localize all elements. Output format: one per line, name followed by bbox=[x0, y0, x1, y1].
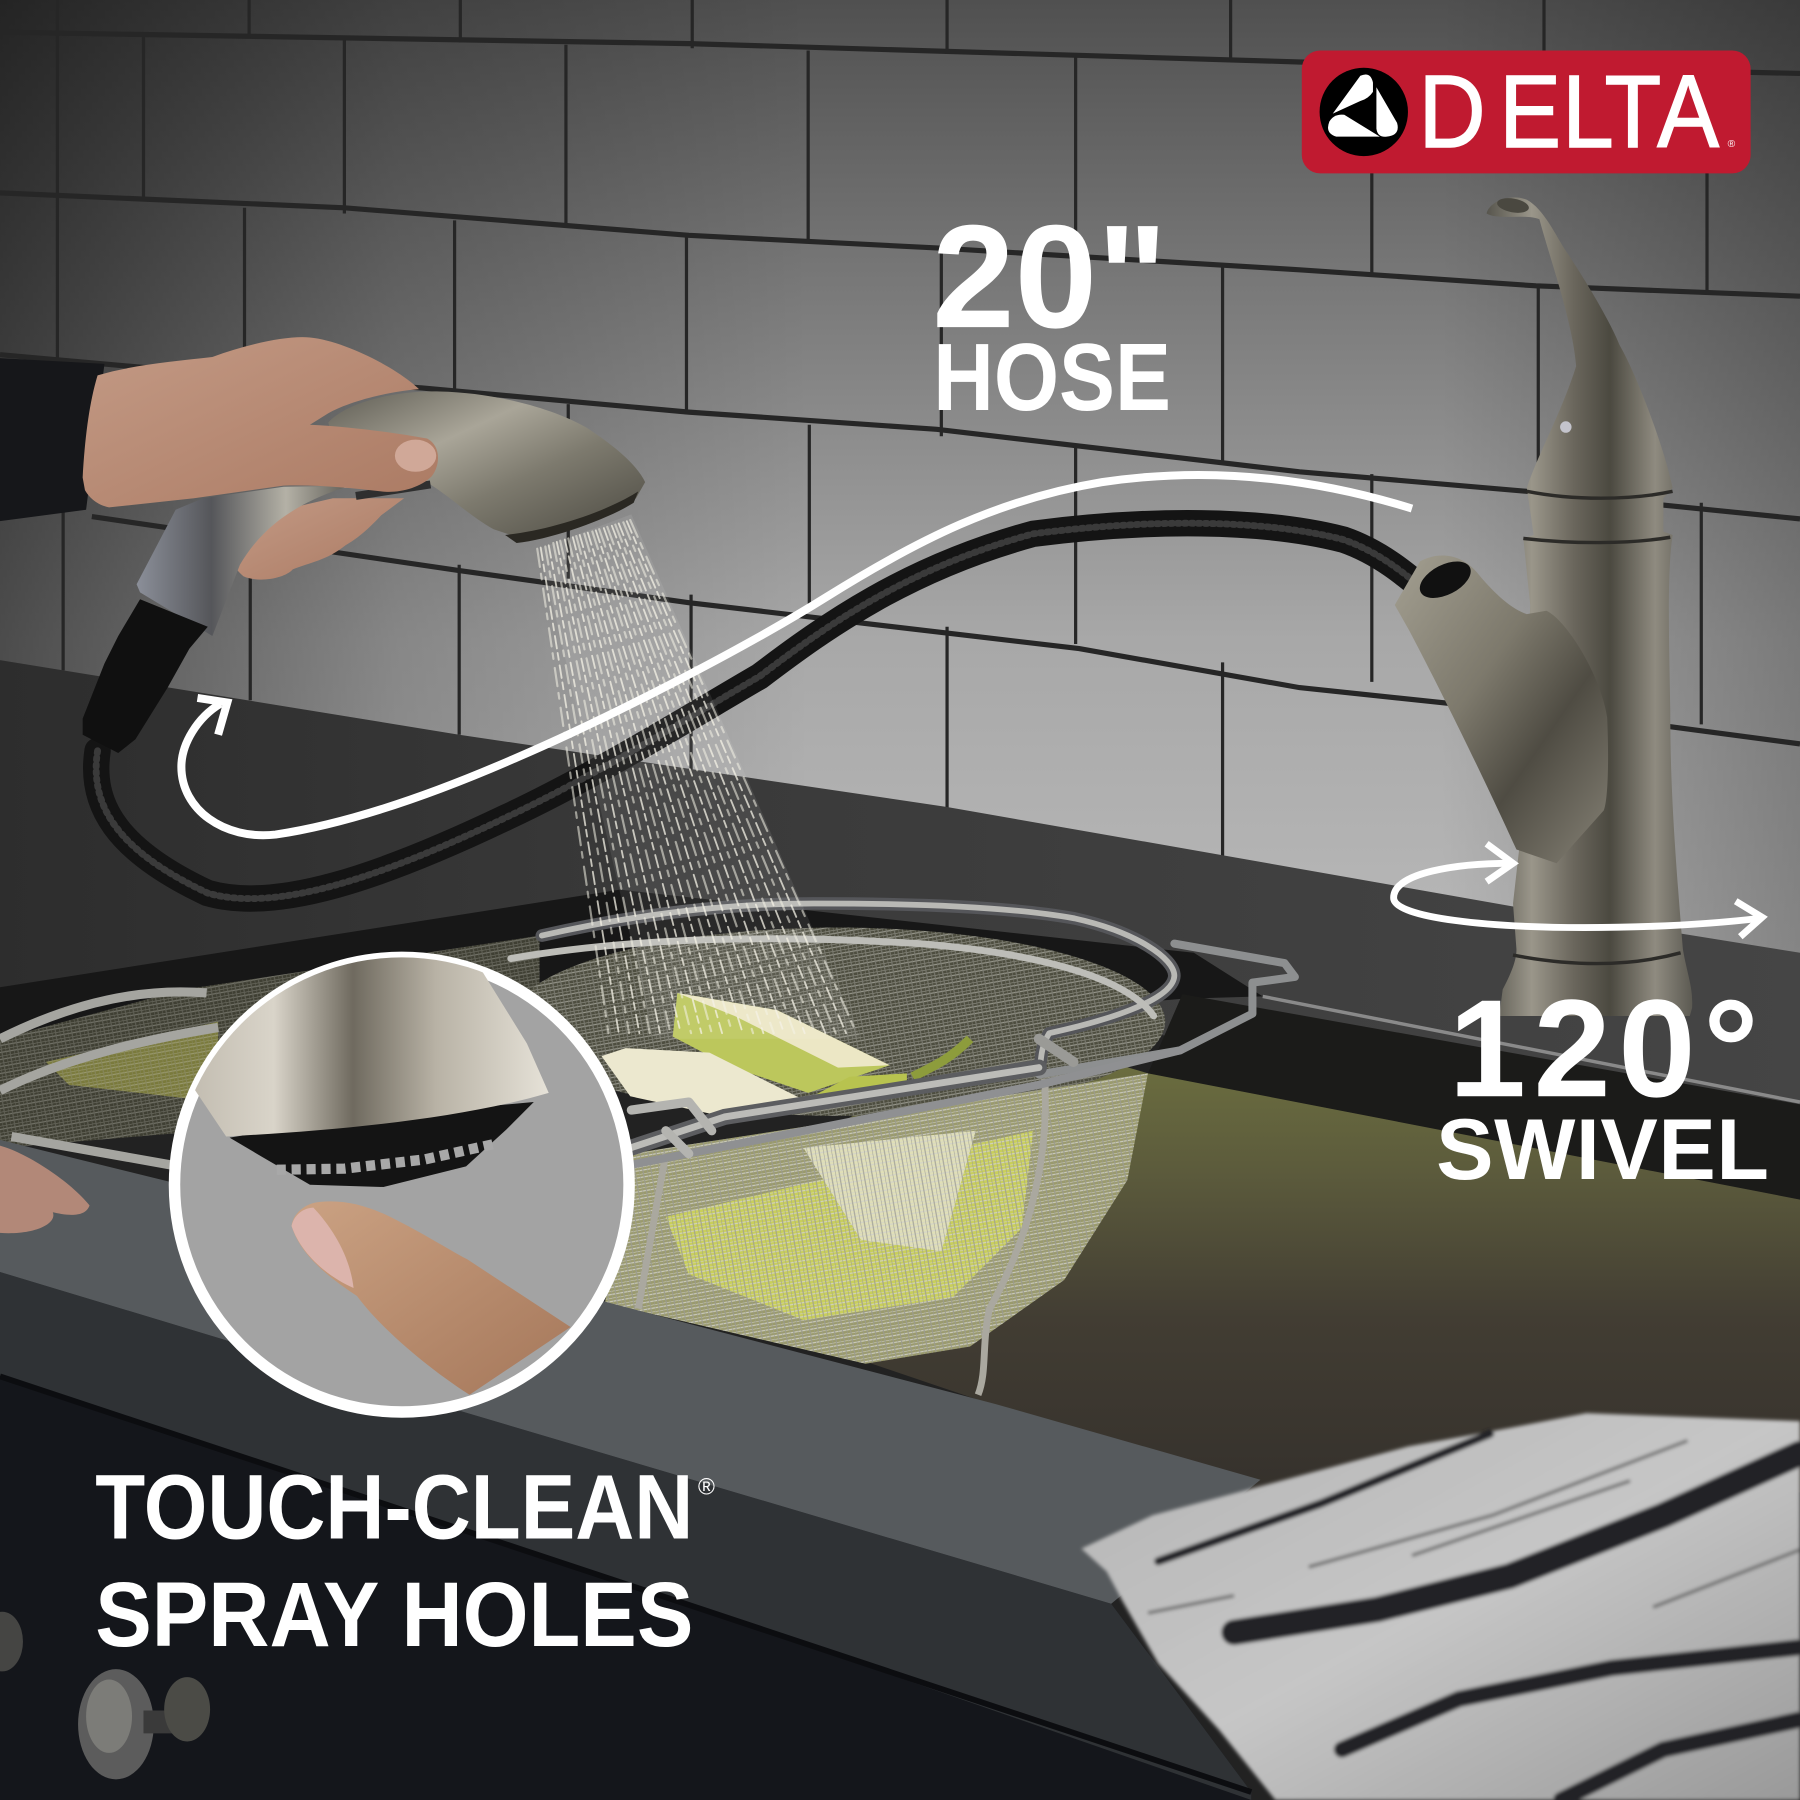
label: touch-clean spray holes: SPRAY HOLES bbox=[95, 1564, 693, 1666]
label: touch-clean spray holes bbox=[95, 1456, 715, 1666]
sink basin bbox=[574, 1033, 1800, 1492]
lower fingers bbox=[233, 498, 404, 580]
swivel arrow bbox=[1394, 844, 1762, 937]
pear slices bbox=[602, 993, 970, 1114]
label: 20 inch hose: 20" bbox=[932, 195, 1167, 359]
hose length arrow bbox=[181, 475, 1412, 835]
inset sprayer base bbox=[230, 1102, 534, 1187]
faucet bbox=[1395, 196, 1692, 1016]
dish towel bbox=[1081, 1413, 1800, 1800]
basket bowl mesh bbox=[605, 1073, 1148, 1395]
label: 120 degree swivel bbox=[1436, 971, 1769, 1198]
label: touch-clean spray holes: TOUCH-CLEAN bbox=[95, 1456, 693, 1558]
countertop behind sink bbox=[0, 660, 1800, 1200]
label: 120 degree swivel: SWIVEL bbox=[1436, 1102, 1769, 1198]
spray nozzles bbox=[277, 1143, 497, 1170]
registered mark: ® bbox=[1728, 139, 1736, 150]
label: 20 inch hose: HOSE bbox=[933, 325, 1171, 431]
sprayer head bbox=[328, 391, 645, 540]
inset sprayer head bbox=[195, 957, 549, 1136]
strainer basket bbox=[0, 903, 1295, 1395]
sleeve bbox=[0, 358, 104, 521]
near countertop bbox=[0, 1140, 1260, 1800]
label: touch-clean spray holes: ® bbox=[698, 1474, 715, 1500]
swivel arrowhead right bbox=[1736, 901, 1762, 937]
handle tip hollow bbox=[1496, 196, 1530, 215]
logo mark bbox=[1320, 68, 1408, 156]
water spray bbox=[537, 514, 861, 1039]
tiled wall bbox=[0, 0, 1800, 1033]
inset finger bbox=[292, 1201, 571, 1395]
faucet handle and body bbox=[1487, 197, 1692, 1016]
arrowhead bbox=[197, 698, 227, 735]
sprayer connector bbox=[83, 599, 208, 753]
fingernail bbox=[292, 1208, 354, 1288]
cabinet knobs bbox=[0, 1612, 210, 1779]
label: 120 degree swivel: 120° bbox=[1449, 971, 1759, 1126]
wordmark: DELTA bbox=[1419, 53, 1720, 169]
fingers at counter edge bbox=[0, 1146, 90, 1233]
spout opening bbox=[1414, 554, 1477, 606]
label: 20 inch hose bbox=[932, 195, 1171, 431]
spout bbox=[1395, 556, 1608, 863]
swivel arrowhead left bbox=[1487, 844, 1513, 882]
hand holding sprayer bbox=[0, 337, 645, 753]
basket left side bbox=[0, 936, 540, 1165]
hand back and thumb bbox=[83, 337, 438, 507]
basket interior bbox=[511, 928, 1165, 1116]
basket rims bbox=[511, 903, 1295, 1164]
touch-clean detail inset bbox=[172, 941, 629, 1412]
delta logo bbox=[1302, 51, 1751, 173]
sprayer neck bbox=[137, 486, 350, 636]
sprayer hose bbox=[96, 523, 1435, 899]
